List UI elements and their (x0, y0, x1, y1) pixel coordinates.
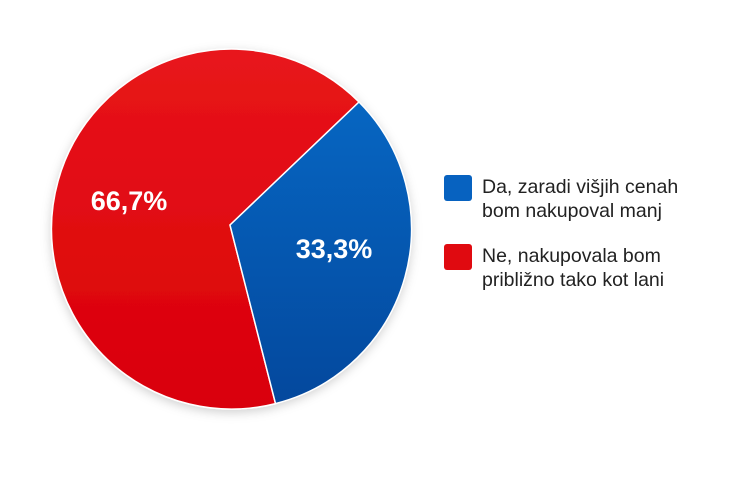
pie slice: blue 33,3% (230, 102, 412, 404)
legend item: red: približno tako kot lani (482, 269, 664, 291)
legend item: blue: bom nakupoval manj (482, 200, 662, 222)
label 33,3%: 33,3% (296, 234, 372, 264)
legend item: blue: Da, zaradi višjih cenah (482, 176, 678, 198)
legend (444, 175, 678, 291)
pie slice: red 66,7% (52, 49, 412, 409)
label 66,7%: 66,7% (91, 186, 167, 216)
legend item: blue (444, 175, 678, 222)
legend item: red: Ne, nakupovala bom (482, 245, 661, 267)
legend item: red (444, 244, 664, 291)
